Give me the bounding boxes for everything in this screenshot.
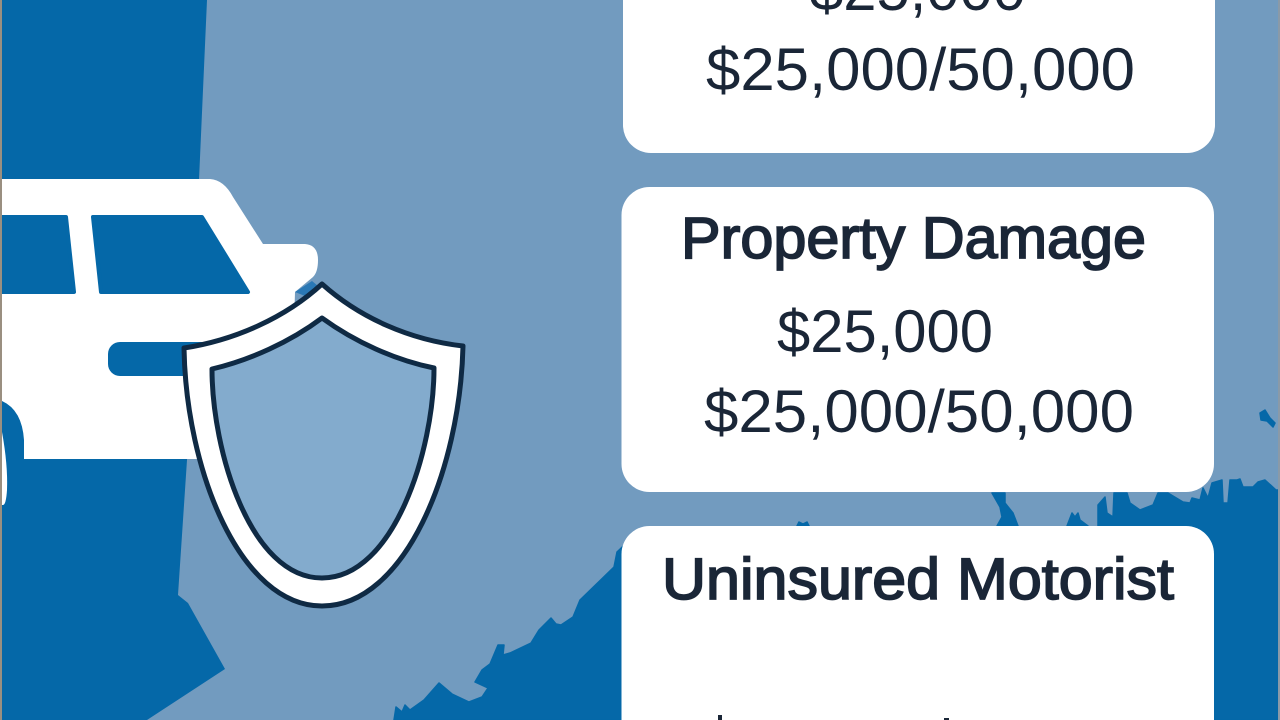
icon: shield xyxy=(184,284,463,606)
map: dark blue coast at bottom right xyxy=(394,410,1280,720)
panel: property damage: Property Damage xyxy=(681,206,1146,271)
icon: car xyxy=(2,179,318,505)
panel: bodily injury limits: $25,000/50,000 xyxy=(706,36,1135,103)
map: dark blue water on the left xyxy=(2,0,225,720)
panel: uninsured motorist xyxy=(622,526,1214,720)
panel: property damage xyxy=(622,187,1214,492)
panel: property damage: $25,000 xyxy=(777,298,993,365)
panel: property damage: $25,000/50,000 xyxy=(704,378,1134,445)
panel: uninsured motorist: Uninsured Motorist xyxy=(662,547,1174,612)
panel: bodily injury limits xyxy=(623,0,1215,153)
